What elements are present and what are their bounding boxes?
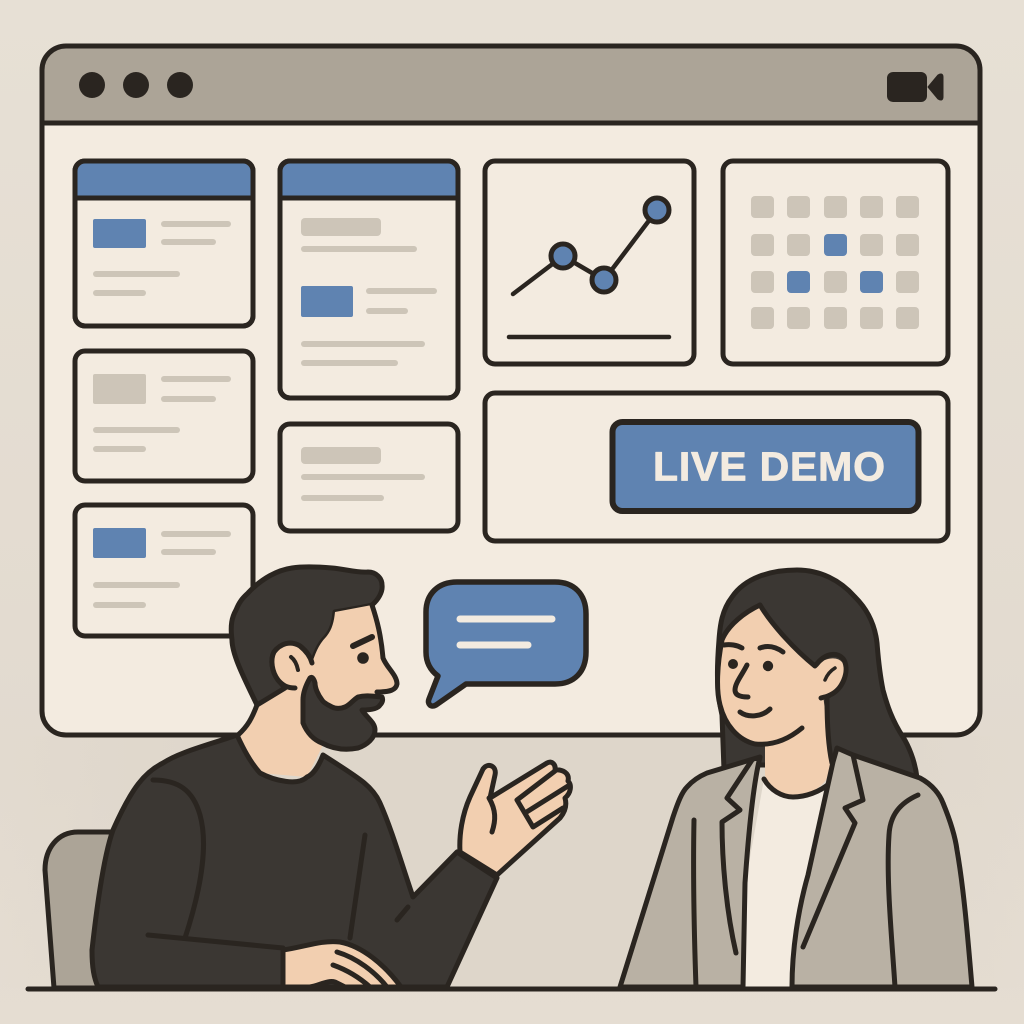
woman neck: [765, 695, 832, 797]
woman neckline: [764, 779, 830, 797]
card: middle left: [75, 351, 253, 481]
card: bottom left: [75, 505, 253, 636]
icon: video camera: [887, 72, 943, 102]
man neck edge: [238, 705, 257, 735]
card: top left: [75, 161, 253, 326]
man eye and brow: [291, 637, 372, 670]
man beard: [303, 677, 383, 749]
woman blazer right: [792, 748, 972, 987]
panel: line chart: [485, 161, 694, 364]
card: tall centre: [280, 161, 458, 398]
man face: [273, 605, 397, 720]
woman face lines: [718, 605, 846, 763]
man sweater: [92, 735, 497, 987]
speech bubble: [426, 582, 586, 706]
blazer lapels: [694, 755, 918, 987]
sweater seams: [148, 780, 408, 948]
window dots: [79, 72, 193, 98]
woman hair: [717, 570, 917, 778]
browser window: [42, 46, 980, 735]
woman blazer left: [620, 757, 760, 987]
title bar: [42, 46, 980, 123]
woman shirt: [743, 779, 830, 987]
woman eyes: [728, 659, 773, 671]
man resting hand: [283, 942, 401, 987]
woman figure: [620, 570, 972, 987]
card: small centre: [280, 424, 458, 531]
table edge: [28, 986, 995, 992]
man neck: [238, 685, 325, 777]
panel: calendar grid: [723, 161, 948, 364]
woman face: [718, 605, 846, 744]
man hair: [231, 567, 382, 705]
man face edge: [372, 605, 397, 692]
man figure: [92, 567, 570, 987]
panel: live demo: LIVE DEMO: [653, 444, 885, 490]
panel: live demo: [485, 393, 948, 541]
man raised hand: [460, 762, 570, 875]
man ear: [272, 643, 312, 688]
chair: [45, 832, 115, 988]
